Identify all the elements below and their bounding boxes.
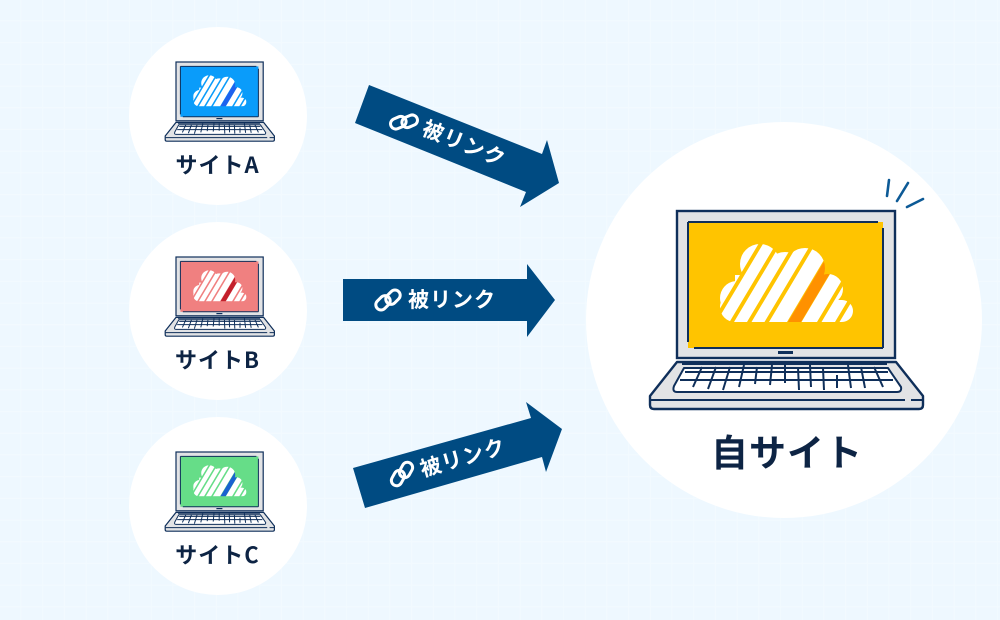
label: own site: 自サイト: [711, 423, 863, 477]
arrow: site A to own site: [355, 85, 559, 207]
panel: site A: [129, 27, 307, 205]
label: site B: サイトB: [175, 343, 260, 375]
arrow: site C to own site: [353, 402, 562, 508]
panel: site C: [129, 417, 307, 595]
icon: large laptop: [650, 211, 923, 409]
icon: laptop B: [165, 257, 274, 336]
circle: site B: [129, 222, 307, 400]
icon: link B: [374, 288, 402, 312]
label: site C: サイトC: [175, 538, 260, 570]
label: site A: サイトA: [175, 148, 260, 180]
icon: link C: [385, 458, 419, 490]
label: backlink B: 被リンク: [408, 284, 496, 314]
panel: own site: [586, 122, 982, 518]
icon: laptop C: [165, 452, 274, 531]
panel: site B: [129, 222, 307, 400]
label: backlink C: 被リンク: [416, 430, 509, 484]
icon: laptop A: [165, 62, 274, 141]
label: backlink A: 被リンク: [418, 113, 511, 173]
circle: site A: [129, 27, 307, 205]
circle: site C: [129, 417, 307, 595]
arrow: site B to own site: [343, 264, 555, 337]
circle: own site: [586, 122, 982, 518]
icon: emphasis marks: [887, 180, 923, 207]
icon: link A: [386, 105, 422, 139]
